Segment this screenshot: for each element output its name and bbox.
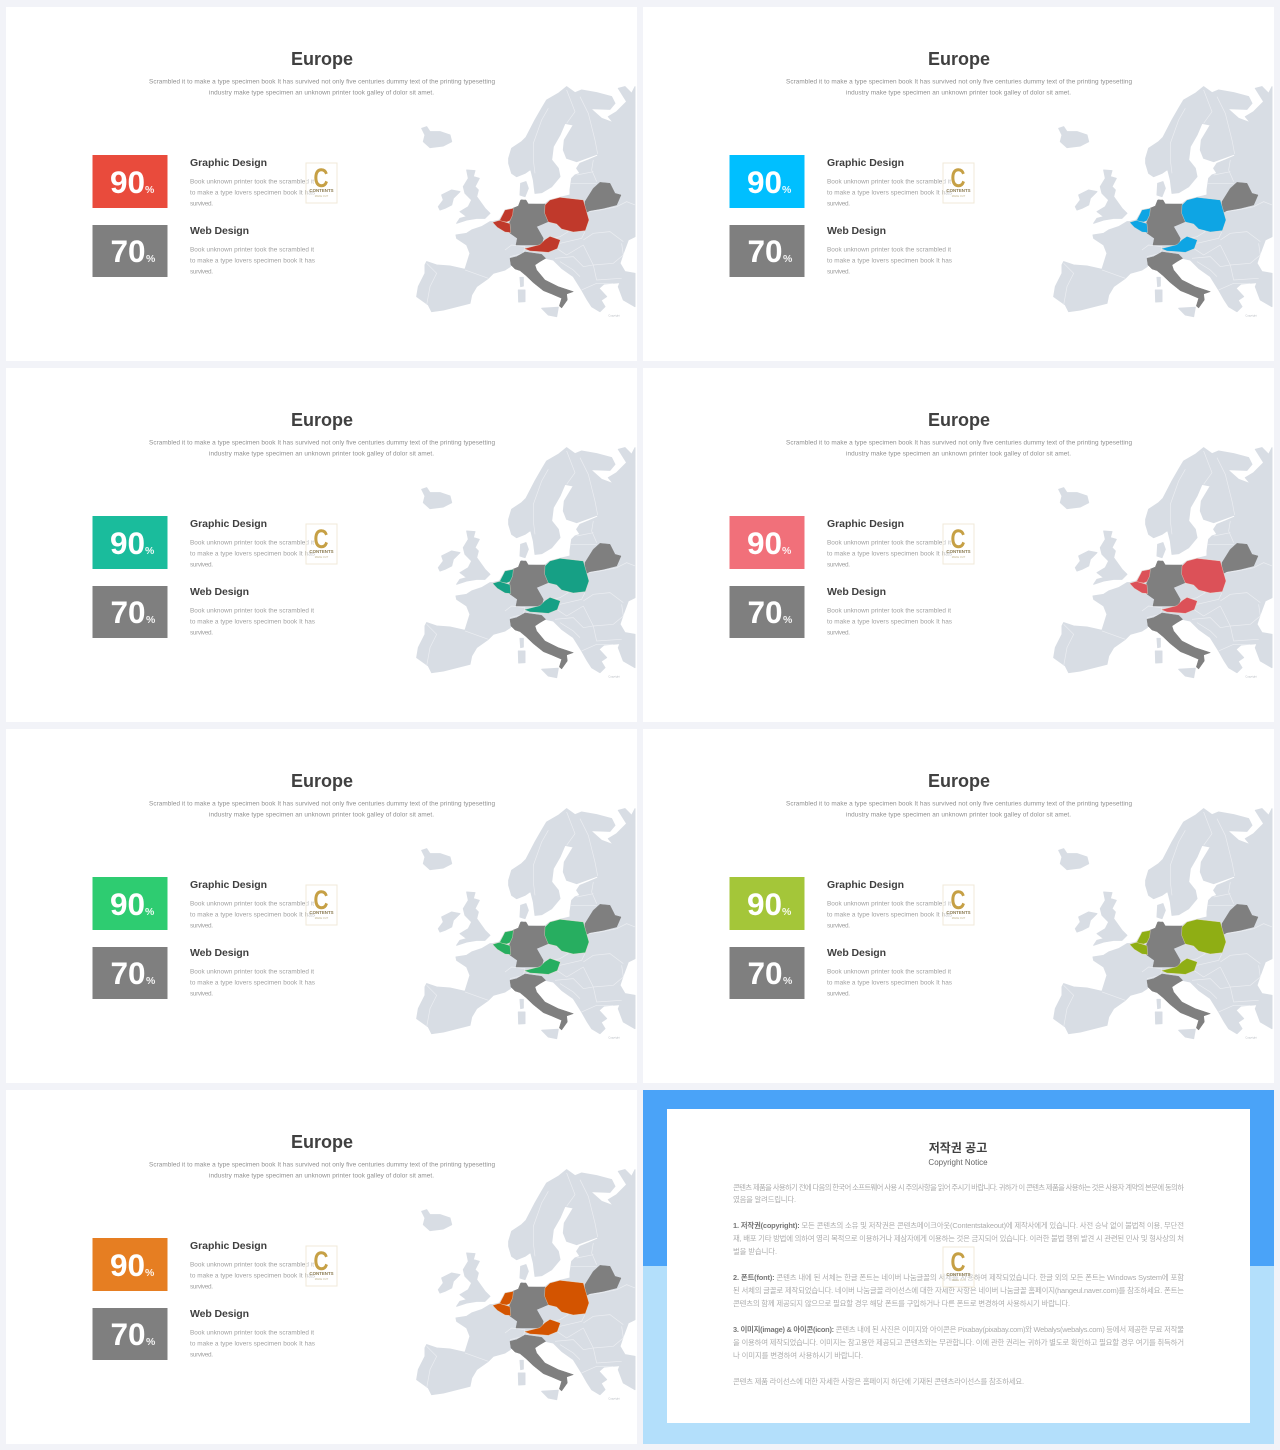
panel: europe red [6,7,637,361]
text block: web design: Book unknown printer took the scrambled it [827,246,951,254]
logo: CONTENTS [309,1271,334,1276]
panel: europe teal [6,368,637,722]
logo: C [314,524,328,554]
map of europe [1054,87,1272,318]
description: industry make type specimen an unknown printer took galley of dolor sit amet. [209,90,434,96]
description [786,440,1132,458]
logo [943,885,974,925]
logo [943,1247,974,1287]
logo [943,524,974,564]
logo [306,163,337,203]
text block: graphic design: to make a type lovers specimen book It has [190,550,315,558]
stat: 70%: 70 [748,955,783,991]
text block: web design: survived. [190,1352,213,1358]
stat: 70% [730,947,804,999]
stat: 90%: 90 [747,164,782,200]
text block: web design [190,947,315,998]
stat: 90%: 90 [110,886,145,922]
description: industry make type specimen an unknown printer took galley of dolor sit amet. [209,450,434,458]
text block: web design [827,225,952,276]
stat: 90%: % [782,906,792,918]
logo: C [314,885,328,915]
text block: graphic design [827,518,952,568]
text block: web design: Web Design [190,225,249,237]
notice section 2: 된 서체의 글꼴로 제작되었습니다. 네이버 나눔글꼴 라이선스에 대한 자세한 사항은 네이버 나눔글꼴 홈페이지(hangeul.naver.com)를 참조하세요. 폰트는 [733,1286,1184,1295]
text block: graphic design: survived. [190,922,213,930]
logo: CONTENTS [946,1272,971,1277]
stat: 70%: 70 [110,955,146,991]
map of europe [417,809,635,1040]
text block: web design: Web Design [827,225,886,237]
text block: graphic design: Book unknown printer took the scrambled it [827,900,951,908]
stat: 90%: 90 [110,525,145,561]
text block: web design: Web Design [190,947,249,959]
text block: web design [190,586,315,636]
text block: graphic design [190,518,315,568]
text block: graphic design [827,157,952,208]
stat: 70% [92,1308,168,1360]
text block: graphic design: Graphic Design [190,518,267,530]
logo: C [950,885,966,915]
text block: graphic design: survived. [190,200,213,208]
description: Scrambled it to make a type specimen book It has survived not only five centuries dummy text of the printing typesetting [786,440,1132,446]
description: industry make type specimen an unknown printer took galley of dolor sit amet. [209,1172,434,1180]
panel: europe lime [643,729,1274,1083]
notice section 3: 나 이미지를 변경하여 사용하시기 바랍니다. [733,1351,863,1360]
stat: 90% [92,1238,168,1291]
description: Scrambled it to make a type specimen book It has survived not only five centuries dummy text of the printing typesetting [149,440,495,446]
text block: graphic design: to make a type lovers specimen book It has [190,190,315,196]
text block: web design: Web Design [827,947,886,959]
description [786,800,1132,818]
description: Scrambled it to make a type specimen book It has survived not only five centuries dummy text of the printing typesetting [786,800,1132,808]
stat: 90% [730,516,804,569]
text block: web design: to make a type lovers specimen book It has [190,258,315,264]
text block: graphic design: Book unknown printer took the scrambled it [827,178,951,186]
logo: CONTENTS [309,549,334,554]
text block: graphic design: Graphic Design [190,1240,267,1252]
map of europe [417,448,635,679]
stat: 90%: 90 [747,886,782,922]
text block: graphic design: Graphic Design [827,879,904,891]
stat: 90%: 90 [110,164,145,200]
notice section 3: 을 이용하여 제작되었습니다. 이미지는 참고용만 제공되고 콘텐츠와는 무관합니다. 이에 관한 권리는 귀하가 별도로 확인하고 필요할 경우 여기를 취득하거 [733,1338,1184,1347]
stat: 70%: 70 [748,233,783,269]
text block: graphic design: Graphic Design [827,157,904,169]
text block: graphic design [190,879,315,930]
text block: graphic design: Graphic Design [190,157,267,169]
map of europe [1054,448,1272,679]
text block: graphic design [190,1240,315,1290]
stat: 70% [730,586,804,638]
stat: 70%: 70 [748,594,783,630]
text block: web design [190,225,315,276]
notice intro: 였음을 알려드립니다. [733,1195,796,1204]
text block: web design: to make a type lovers specimen book It has [190,1340,315,1348]
text block: web design: survived. [190,630,213,636]
text block: web design: Book unknown printer took the scrambled it [190,608,314,614]
description [149,1162,495,1180]
stat: 70%: % [783,614,793,626]
stat: 70%: % [783,975,793,987]
text block: graphic design: Book unknown printer took the scrambled it [827,540,951,546]
stat: 70% [92,586,168,638]
notice section 1: 벌을 받습니다. [733,1247,777,1256]
text block: graphic design: survived. [827,922,850,930]
logo [943,163,974,203]
logo: CONTENTS [946,910,971,915]
text block: web design: Book unknown printer took the scrambled it [190,246,314,254]
title: Europe [291,49,353,69]
description [149,78,495,96]
text block: graphic design: to make a type lovers specimen book It has [190,912,315,918]
stat: 70%: 70 [110,233,146,269]
text block: web design: Web Design [190,1308,249,1320]
stat: 70%: 70 [110,594,146,630]
text block: graphic design: Graphic Design [827,518,904,530]
text block: web design: survived. [190,990,213,998]
map of europe [1054,809,1272,1040]
text block: graphic design: survived. [827,562,850,568]
panel: europe green [6,729,637,1083]
logo [306,885,337,925]
logo: C [950,1247,966,1277]
stat: 90% [92,516,168,569]
logo: C [314,163,328,193]
description: Scrambled it to make a type specimen book It has survived not only five centuries dummy text of the printing typesetting [149,800,495,808]
stat: 90% [730,877,804,930]
text block: graphic design: to make a type lovers specimen book It has [827,550,952,558]
text block: web design: survived. [827,268,850,276]
stat: 70%: % [146,614,156,626]
text block: graphic design: survived. [190,562,213,568]
text block: graphic design: Graphic Design [190,879,267,891]
map of europe [417,1170,635,1401]
stat: 70% [730,225,804,277]
description: industry make type specimen an unknown printer took galley of dolor sit amet. [846,90,1071,96]
logo: MAKE OUT [315,1277,329,1281]
text block: web design: Book unknown printer took the scrambled it [190,968,314,976]
text block: graphic design [827,879,952,930]
text block: graphic design: survived. [827,200,850,208]
text block: web design: survived. [190,268,213,276]
text block: web design: survived. [827,630,850,636]
text block: web design: Book unknown printer took the scrambled it [827,968,951,976]
stat: 90% [92,155,168,208]
notice intro: 콘텐츠 제품을 사용하기 전에 다음의 한국어 소프트웨어 사용 시 주의사항을 읽어 주시기 바랍니다. 귀하가 이 콘텐츠 제품을 사용하는 것은 사용자 계약의 본문에 동의하 [733,1183,1184,1192]
logo [306,1246,337,1286]
text block: web design: Book unknown printer took the scrambled it [190,1330,314,1336]
stat: 70%: % [146,1336,156,1348]
notice section 1: 재, 배포 기타 방법에 의하여 영리 목적으로 이용하거나 제삼자에게 이용하는 것은 금지되어 있습니다. 이러한 불법 행위 발견 시 관련된 민사 및 형사상의 처 [733,1234,1184,1243]
stat: 70% [92,225,168,277]
text block: web design: Web Design [827,586,886,598]
title: Europe [928,771,990,791]
logo: C [950,163,966,193]
description: Scrambled it to make a type specimen book It has survived not only five centuries dummy text of the printing typesetting [149,78,495,86]
stat: 70%: 70 [110,1316,146,1352]
text block: web design: to make a type lovers specimen book It has [827,980,952,986]
text block: web design: Web Design [190,586,249,598]
notice section 2 [733,1273,1184,1308]
stat: 70% [92,947,168,999]
panel: europe blue [643,7,1274,361]
description: Scrambled it to make a type specimen book It has survived not only five centuries dummy text of the printing typesetting [149,1162,495,1168]
text block: graphic design: Book unknown printer took the scrambled it [190,900,314,908]
stat: 70%: % [146,253,156,265]
logo: CONTENTS [946,549,971,554]
copyright title: 저작권 공고 [929,1140,987,1155]
text block: graphic design: Book unknown printer took the scrambled it [190,178,314,186]
notice section 2: 2. 폰트(font): 콘텐츠 내에 된 서체는 한글 폰트는 네이버 나눔글꼴의 서체를 사용하여 제작되었습니다. 한글 외의 모든 폰트는 Windows System에 포함 [733,1273,1184,1282]
stat: 90%: % [145,1267,155,1279]
text block: graphic design: survived. [190,1284,213,1290]
text block: graphic design: Book unknown printer took the scrambled it [190,1262,314,1268]
logo: MAKE OUT [952,555,966,559]
title: Europe [928,410,990,430]
stat: 90%: 90 [747,525,782,561]
text block: web design: to make a type lovers specimen book It has [190,980,315,986]
stat: 90% [730,155,804,208]
description: industry make type specimen an unknown printer took galley of dolor sit amet. [846,450,1071,458]
map of europe [417,87,635,318]
title: Europe [291,410,353,430]
stat: 90%: % [145,906,155,918]
text block: graphic design: to make a type lovers specimen book It has [827,190,952,196]
title: Europe [291,1132,353,1152]
text block: web design: to make a type lovers specimen book It has [190,618,315,626]
text block: graphic design: to make a type lovers specimen book It has [190,1272,315,1280]
description: Scrambled it to make a type specimen book It has survived not only five centuries dummy text of the printing typesetting [786,78,1132,86]
logo: CONTENTS [309,188,334,193]
logo: MAKE OUT [315,555,329,559]
title: Europe [928,49,990,69]
text block: graphic design: Book unknown printer took the scrambled it [190,540,314,546]
logo: CONTENTS [309,910,334,915]
stat: 70%: % [783,253,793,265]
stat: 90%: % [782,545,792,557]
stat: 90%: % [145,184,155,196]
notice section 1 [733,1221,1184,1256]
copyright subtitle: Copyright Notice [928,1158,988,1167]
panel: copyright notice [643,1090,1274,1444]
stat: 90%: % [782,184,792,196]
stat: 90%: 90 [110,1247,145,1283]
text block: web design: Book unknown printer took the scrambled it [827,608,951,614]
notice section 2: 콘텐츠의 함께 제공되지 않으므로 필요할 경우 해당 폰트를 구입하거나 다른 폰트로 변경하여 사용하시기 바랍니다. [733,1299,1070,1308]
logo: CONTENTS [946,188,971,193]
description: industry make type specimen an unknown printer took galley of dolor sit amet. [209,812,434,818]
description [149,440,495,458]
logo: C [314,1246,328,1276]
text block: web design: survived. [827,990,850,998]
notice footer: 콘텐츠 제품 라이선스에 대한 자세한 사항은 홈페이지 하단에 기재된 콘텐츠라이선스를 참조하세요. [733,1377,1024,1386]
notice intro [733,1183,1184,1204]
description [149,800,495,818]
stat: 90% [92,877,168,930]
logo: C [950,524,966,554]
stat: 70%: % [146,975,156,987]
logo: MAKE OUT [952,1278,966,1282]
text block: web design: to make a type lovers specimen book It has [827,618,952,626]
notice section 3: 3. 이미지(image) & 아이콘(icon): 콘텐츠 내에 된 사진은 이미지와 아이콘은 Pixabay(pixabay.com)와 Webalys(webalys.com) 등에서 제공한 무료 저작물 [733,1325,1184,1334]
panel: europe pink [643,368,1274,722]
panel: europe orange [6,1090,637,1444]
title: Europe [291,771,353,791]
description [786,78,1132,96]
notice section 1: 1. 저작권(copyright): 모든 콘텐츠의 소유 및 저작권은 콘텐츠메이크아웃(Contentstakeout)에 제작사에게 있습니다. 사전 승낙 없이 불법적 이용, 무단전 [733,1221,1184,1230]
logo: MAKE OUT [952,916,966,920]
logo: MAKE OUT [315,194,329,198]
logo: MAKE OUT [315,916,329,920]
text block: web design [827,586,952,636]
text block: web design [190,1308,315,1358]
logo: MAKE OUT [952,194,966,198]
text block: web design: to make a type lovers specimen book It has [827,258,952,264]
description: industry make type specimen an unknown printer took galley of dolor sit amet. [846,812,1071,818]
stat: 90%: % [145,545,155,557]
text block: graphic design: to make a type lovers specimen book It has [827,912,952,918]
text block: graphic design [190,157,315,208]
logo [306,524,337,564]
text block: web design [827,947,952,998]
notice section 3 [733,1325,1184,1360]
